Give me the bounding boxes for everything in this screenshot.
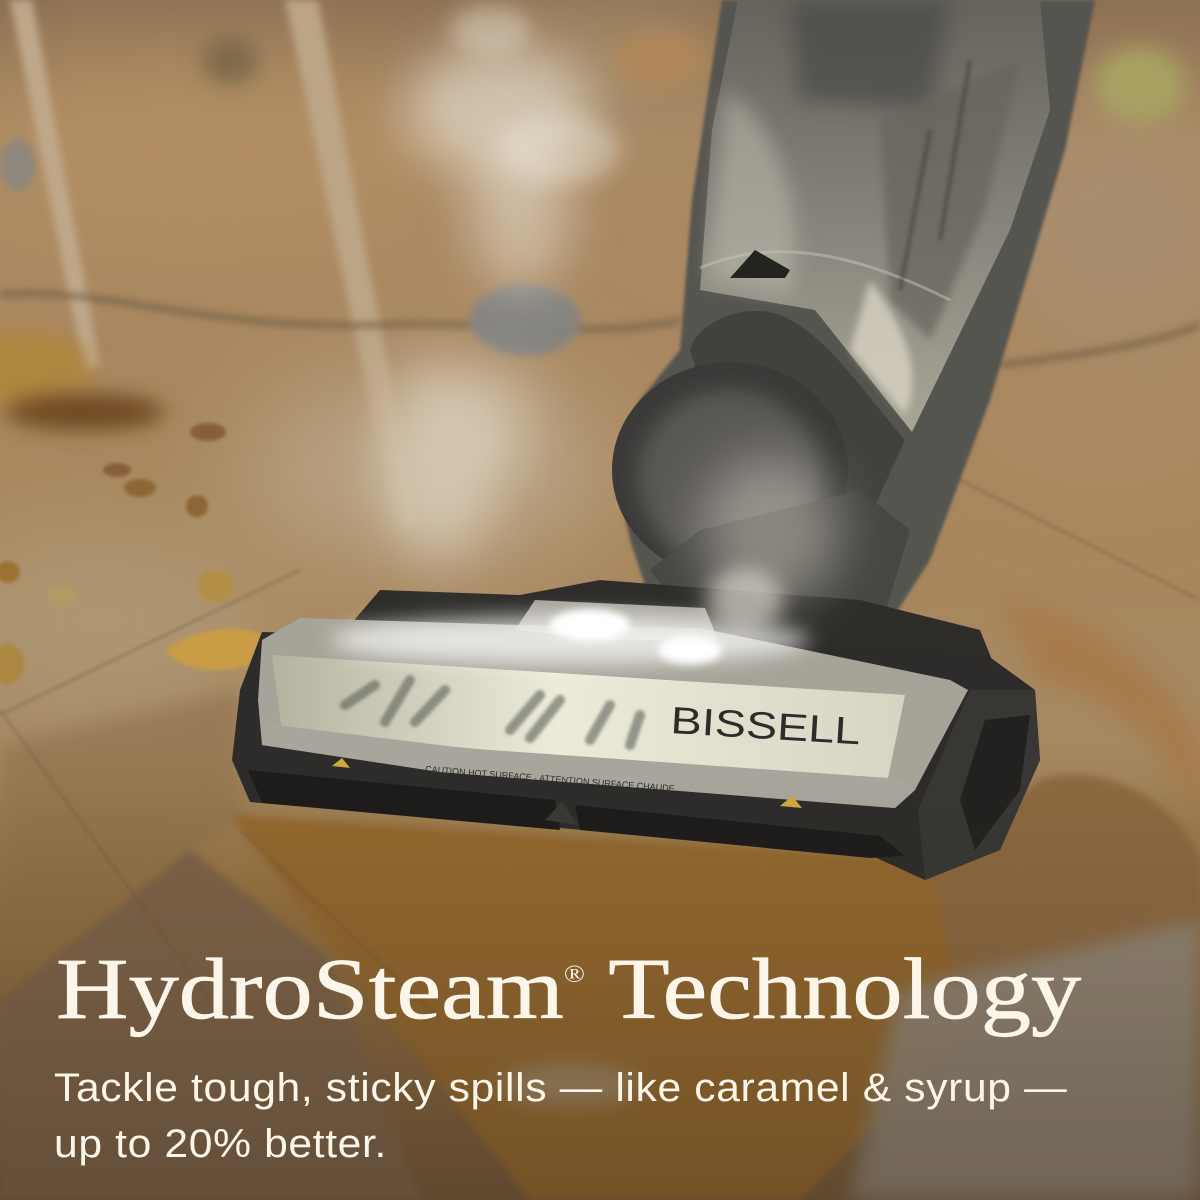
vacuum upright body — [612, 0, 1095, 630]
subtitle — [54, 1066, 1067, 1166]
warning triangles — [332, 758, 802, 808]
right side panel — [918, 690, 1040, 880]
rear housing — [350, 580, 1000, 680]
roller brand: BISSELL — [669, 700, 862, 753]
main dark body — [232, 632, 1040, 880]
spilled crumbs — [0, 330, 262, 684]
title: HydroSteam® Technology — [56, 940, 1081, 1037]
cover handle — [515, 600, 718, 640]
steam clouds — [380, 5, 840, 632]
brush roller — [272, 655, 905, 778]
background glow patches — [0, 10, 1200, 720]
subtitle: up to 20% better. — [54, 1122, 387, 1166]
chair legs — [0, 0, 1200, 530]
wood floor planks — [0, 470, 1200, 1200]
round hub — [612, 362, 848, 578]
tank logo mark — [730, 250, 790, 278]
subtitle: Tackle tough, sticky spills — like caramel & syrup — — [54, 1066, 1067, 1110]
cover lip — [262, 724, 915, 808]
cover highlight — [330, 616, 810, 664]
front vents — [248, 770, 560, 830]
neck — [690, 311, 905, 590]
bottom shade behind text — [0, 780, 1200, 1200]
lower joint — [650, 490, 910, 630]
body shell — [615, 0, 1095, 630]
clear tank — [700, 0, 1050, 432]
cover lip text: CAUTION HOT SURFACE · ATTENTION SURFACE CHAUDE — [425, 764, 675, 794]
clear cover — [258, 618, 968, 808]
roller tufts — [345, 680, 640, 745]
vacuum cleaning head — [232, 580, 1040, 880]
